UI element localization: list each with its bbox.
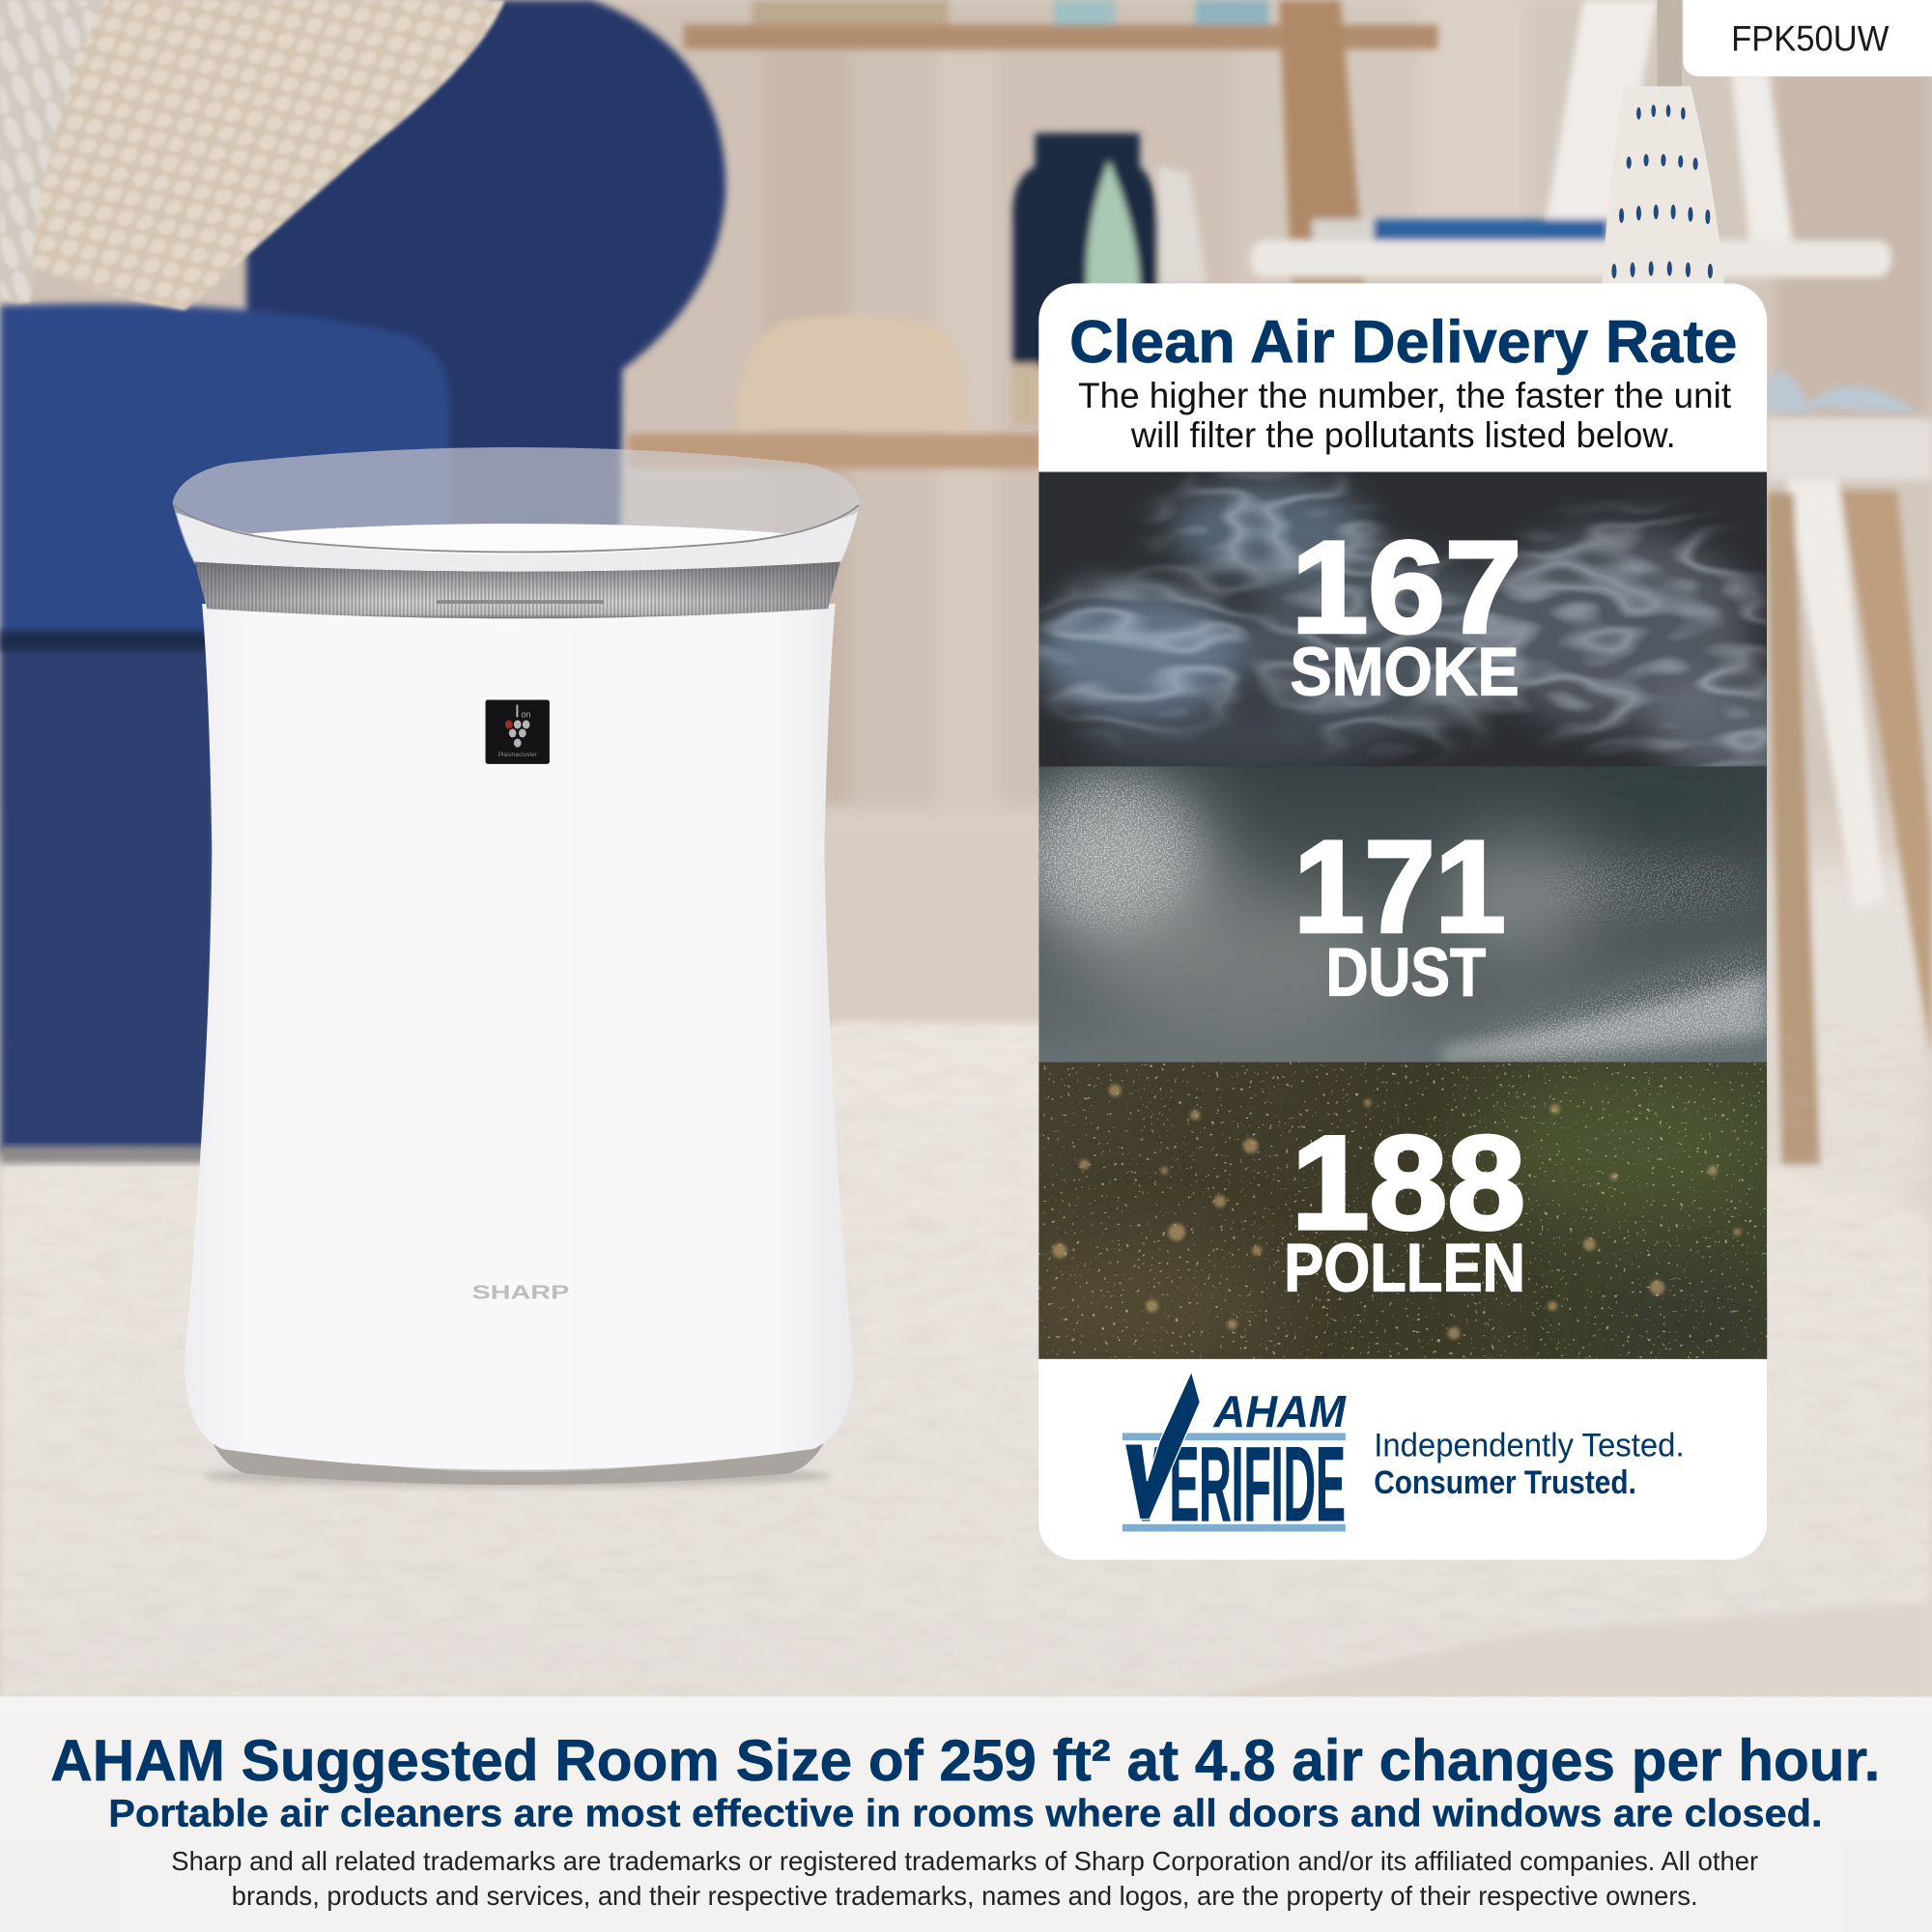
pollen value: 188 [1292, 1109, 1525, 1258]
card background [1038, 283, 1767, 1560]
pollen speckle [1038, 1062, 1767, 1359]
card description: The higher the number, the faster the unit [1078, 376, 1731, 415]
plasmacluster label: Plasmacluster [498, 752, 538, 758]
check mark [1125, 1372, 1200, 1520]
trademark text: Sharp and all related trademarks are trademarks or registered trademarks of Sharp Corporation and/or its affiliated companies. All other [171, 1846, 1758, 1876]
upper shelf [684, 25, 1438, 49]
pollen tone patches [1038, 1062, 1768, 1359]
rug surface [0, 1023, 1932, 1713]
floor shadow below sofa [0, 1146, 215, 1163]
translucent lid [173, 447, 860, 564]
knit pillow [31, 0, 505, 310]
AHAM wordmark: AHAM [1212, 1386, 1348, 1436]
smoke band [1035, 472, 1799, 777]
trademark text: brands, products and services, and their respective trademarks, names and logos, are the property of their respective owners. [232, 1881, 1698, 1911]
card description [1078, 376, 1731, 455]
right stool seat [1767, 419, 1932, 480]
wooden shelf post [1279, 0, 1365, 283]
hat [735, 316, 967, 431]
floor [0, 807, 1932, 1226]
logo tagline: Consumer Trusted. [1374, 1464, 1636, 1501]
room size heading: AHAM Suggested Room Size of 259 ft² at 4.8 air changes per hour. [50, 1728, 1880, 1793]
dust clouds [1038, 766, 1619, 1047]
lid rim line [174, 505, 859, 552]
dust value: 171 [1293, 813, 1506, 959]
plasmacluster badge [486, 699, 550, 764]
wall [0, 0, 1932, 838]
objects on upper shelf [752, 0, 949, 25]
air purifier [173, 447, 860, 1488]
shelves and decor [629, 0, 1932, 1164]
rug [0, 1023, 1932, 1713]
pollen label: POLLEN [1284, 1230, 1525, 1306]
dust band [1016, 764, 1775, 1064]
sofa base [0, 640, 215, 1152]
logo bars [1122, 1433, 1346, 1531]
dust label: DUST [1325, 934, 1486, 1010]
smoke label: SMOKE [1290, 633, 1520, 709]
logo tagline [1374, 1428, 1685, 1501]
pillows [0, 0, 505, 310]
sofa arm [246, 0, 725, 640]
white side table frame [1543, 0, 1793, 241]
smoke wisps [1038, 472, 1767, 768]
floor shadow under purifier [203, 1465, 832, 1488]
purifier base edge [210, 1435, 828, 1485]
lower shelf [629, 434, 1041, 469]
vase droplets [1611, 104, 1713, 278]
Verifide wordmark: V [1128, 1426, 1163, 1544]
smoke value: 167 [1292, 514, 1521, 660]
lid front glass [176, 513, 858, 572]
dust speckle [1038, 766, 1767, 1064]
card heading: Clean Air Delivery Rate [1069, 308, 1737, 376]
bottom information panel [0, 1696, 1932, 1932]
card description: will filter the pollutants listed below. [1130, 415, 1676, 455]
model tab [1683, 0, 1932, 76]
panel: clean air delivery rate card: ERIFIDE [1169, 1426, 1346, 1544]
vase [1602, 0, 1725, 290]
model number: FPK50UW [1731, 18, 1889, 58]
sharp logo: SHARP [472, 1282, 569, 1303]
sofa seat cushion [0, 303, 450, 640]
dust spray [1441, 974, 1767, 1062]
blue book [1312, 219, 1608, 242]
white throw [0, 0, 111, 303]
white stool leg [1786, 480, 1886, 909]
rug texture [0, 1023, 1932, 1700]
purifier body [185, 604, 853, 1470]
panel: clean air delivery rate card [1010, 283, 1811, 1560]
side table top [1251, 241, 1891, 277]
wooden stool legs [1767, 493, 1820, 1164]
ion mark: on [522, 709, 530, 719]
top white panel [234, 524, 801, 557]
grape dots [505, 705, 529, 748]
ribbed band [195, 562, 840, 618]
smoke clouds [1035, 480, 1799, 777]
pollen bokeh [1052, 1084, 1741, 1339]
logo tagline: Independently Tested. [1374, 1428, 1685, 1464]
sofa seam shadow [0, 631, 215, 650]
trademark text [171, 1846, 1758, 1911]
closed rooms note: Portable air cleaners are most effective in rooms where all doors and windows are closed. [108, 1792, 1822, 1834]
sofa [0, 0, 725, 1163]
lower rug edge [1182, 1602, 1932, 1700]
AHAM Verifide logo [1122, 1372, 1348, 1544]
band indicator strip [437, 600, 604, 604]
pollen band [1038, 1062, 1768, 1359]
bright floor at right [1768, 863, 1932, 1233]
dark bottle [1012, 133, 1158, 370]
